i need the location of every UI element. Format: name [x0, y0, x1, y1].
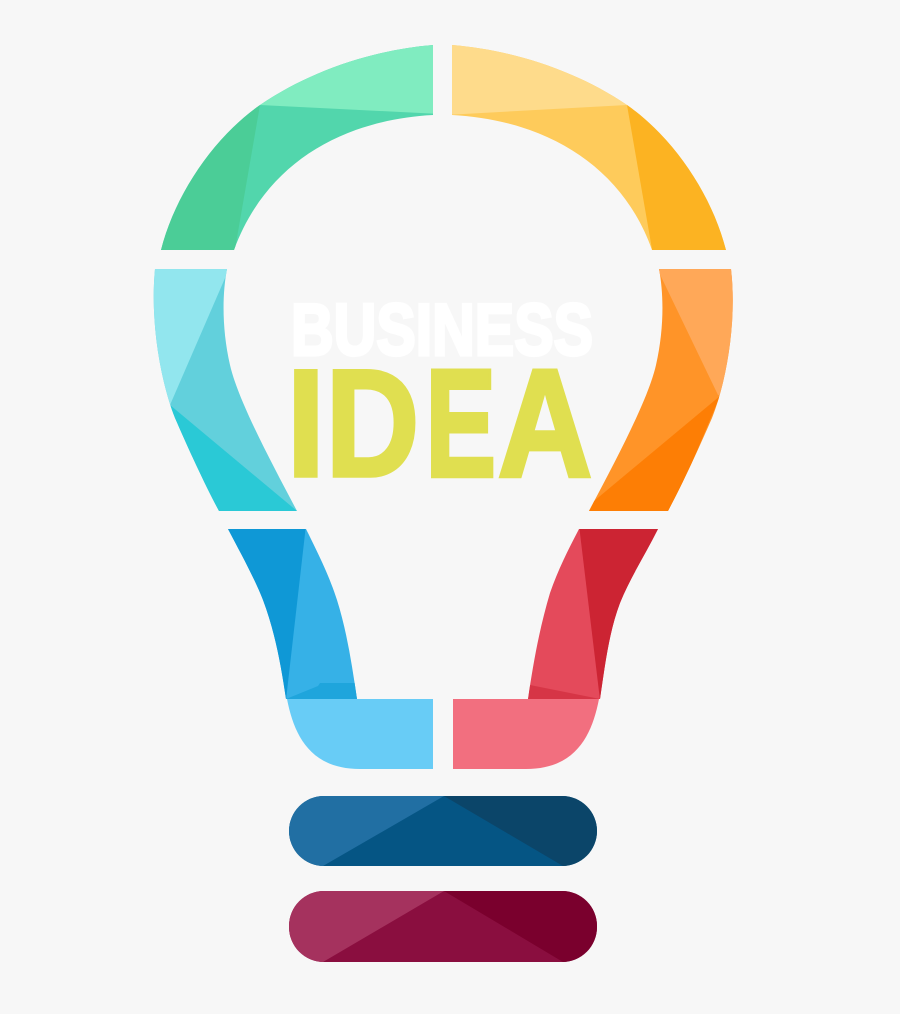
segment: cyan left	[154, 269, 297, 511]
segment: yellow top-right arc	[445, 40, 735, 255]
heading: IDEA: A	[498, 338, 592, 509]
heading: BUSINESS: BUSINESS	[291, 290, 593, 371]
segment: orange right	[589, 269, 733, 511]
heading: IDEA: E	[426, 337, 496, 509]
base bar: maroon	[289, 891, 597, 962]
segment: light blue base left	[287, 699, 433, 769]
segment: pink base right	[453, 699, 599, 769]
base bar: blue	[289, 796, 597, 866]
heading: IDEA: D	[326, 338, 419, 509]
segment: green top-left arc	[161, 45, 433, 250]
heading: IDEA	[286, 337, 592, 509]
light bulb icon	[145, 40, 742, 965]
segment: red neck right	[528, 529, 658, 699]
heading: IDEA: I	[286, 339, 325, 509]
segment: blue neck left	[228, 529, 357, 699]
